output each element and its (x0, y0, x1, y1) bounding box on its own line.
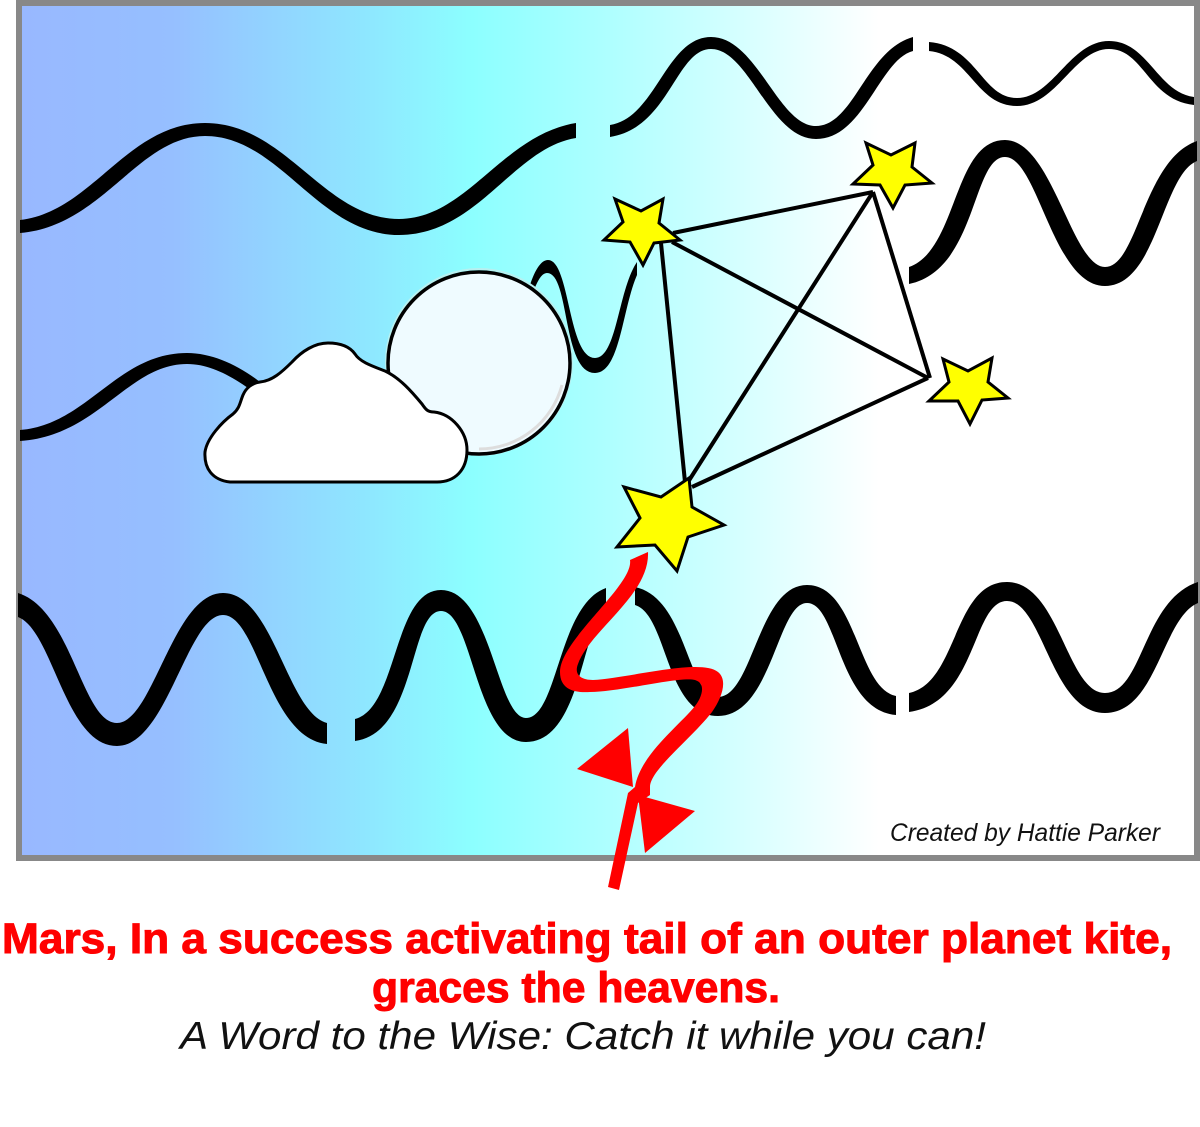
star: bottom (617, 478, 724, 571)
subheading: A Word to the Wise: Catch it while you can! (178, 1015, 986, 1058)
tail bow left (577, 728, 633, 787)
moon (386, 269, 572, 455)
kite lines (661, 192, 930, 487)
tail bow right (638, 795, 695, 853)
star: upper left (604, 199, 680, 265)
headline line 1: Mars, In a success activating tail of an outer planet kite, (2, 915, 1172, 963)
cloud (205, 343, 467, 482)
headline line 2: graces the heavens. (372, 964, 780, 1012)
middle wave left (20, 353, 260, 441)
credit: Created by Hattie Parker (890, 819, 1162, 847)
middle wave right (909, 140, 1197, 286)
lower wave section 2 (355, 588, 606, 742)
lower wave section 1 (18, 593, 327, 746)
panel: sky frame (19, 3, 1197, 858)
lower wave section 3 (635, 585, 896, 716)
lower wave section 4 (909, 582, 1198, 713)
middle wave centre (530, 260, 637, 373)
upper wave right (929, 41, 1194, 106)
upper wave middle (610, 37, 913, 139)
star: right (929, 358, 1008, 424)
upper wave left (20, 123, 576, 235)
kite tail (560, 552, 723, 890)
star: upper right (853, 143, 932, 208)
